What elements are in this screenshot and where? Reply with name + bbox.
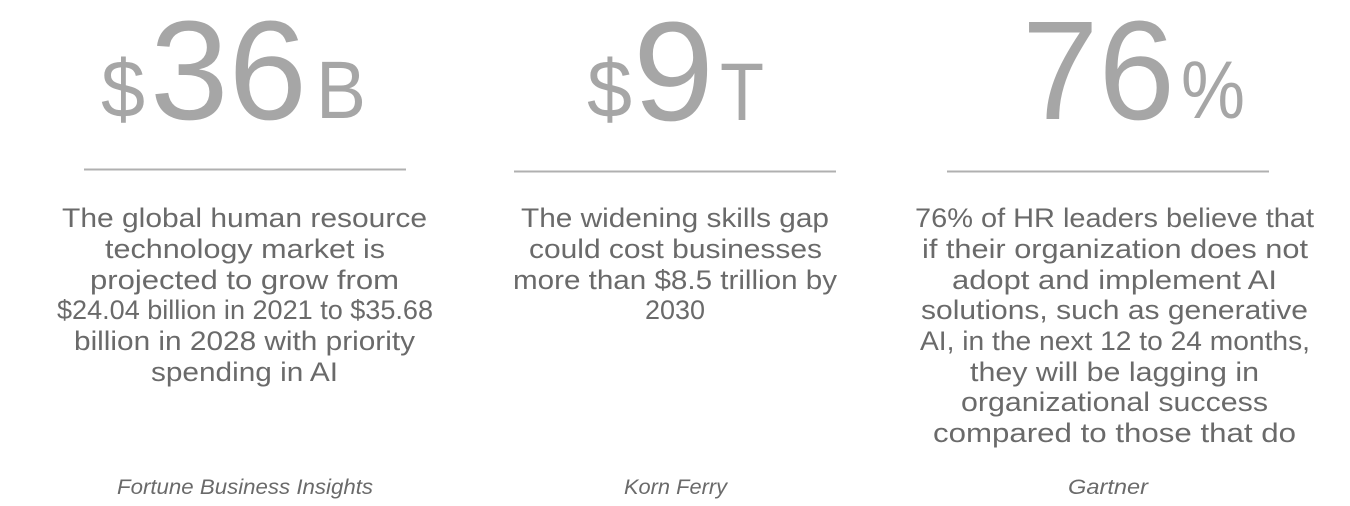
description: HR leaders belief: AI, in the next 12 to 24 months, bbox=[920, 326, 1310, 356]
description: HR leaders belief: solutions, such as generative bbox=[921, 295, 1308, 325]
description: market growth: billion in 2028 with priority bbox=[74, 326, 416, 356]
description: skills gap: more than $8.5 trillion by bbox=[513, 265, 838, 295]
description: skills gap: 2030 bbox=[645, 295, 705, 325]
description: HR leaders belief: compared to those that do bbox=[933, 418, 1296, 448]
description: market growth: The global human resource bbox=[62, 203, 427, 233]
description: HR leaders belief: organizational success bbox=[961, 387, 1268, 417]
statistic: $9 T: T bbox=[720, 47, 764, 138]
description: HR leaders belief bbox=[915, 203, 1315, 448]
description: market growth: $24.04 billion in 2021 to $35.68 bbox=[57, 295, 433, 325]
source: Gartner: Gartner bbox=[1068, 476, 1149, 499]
description: market growth: spending in AI bbox=[151, 357, 338, 387]
statistic: 76%: % bbox=[1181, 45, 1245, 136]
statistic: $36 B: B bbox=[316, 45, 366, 136]
source: Fortune Business Insights: Fortune Business Insights bbox=[117, 476, 374, 499]
description: HR leaders belief: 76% of HR leaders believe that bbox=[915, 203, 1315, 233]
statistic: $9 T bbox=[587, 0, 764, 150]
description: HR leaders belief: adopt and implement AI bbox=[952, 265, 1277, 295]
statistic: $9 T: $ bbox=[587, 44, 632, 135]
description: market growth: technology market is bbox=[105, 234, 385, 264]
description: HR leaders belief: if their organization does not bbox=[922, 234, 1309, 264]
description: skills gap: The widening skills gap bbox=[521, 203, 829, 233]
panel: skills gap cost bbox=[513, 0, 838, 499]
panel: HR technology market bbox=[57, 0, 433, 499]
description: market growth: projected to grow from bbox=[90, 265, 399, 295]
statistic: $36 B bbox=[101, 0, 366, 149]
description: HR leaders belief: they will be lagging in bbox=[970, 357, 1259, 387]
description: skills gap: could cost businesses bbox=[529, 234, 822, 264]
statistic: $36 B: $ bbox=[101, 44, 145, 135]
panel: HR leaders and AI bbox=[915, 0, 1315, 499]
description: market growth bbox=[57, 203, 433, 387]
description: skills gap bbox=[513, 203, 838, 325]
source: Korn Ferry: Korn Ferry bbox=[624, 476, 729, 499]
